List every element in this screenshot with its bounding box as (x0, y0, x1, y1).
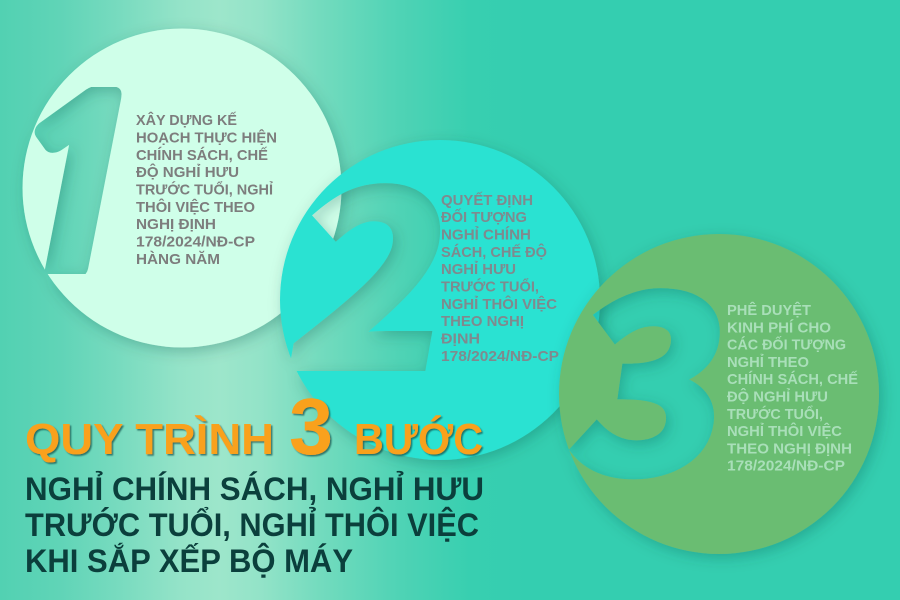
text block: step 2: QUYẾT ĐỊNH (441, 192, 533, 209)
subtitle: KHI SẮP XẾP BỘ MÁY (25, 543, 353, 579)
title (25, 382, 483, 471)
panel: step 1 circle with cut-out numeral (22, 28, 342, 348)
text block: step 3: KINH PHÍ CHO (727, 320, 831, 336)
title: 3 (289, 382, 333, 471)
text block: step 1: TRƯỚC TUỔI, NGHỈ (136, 180, 273, 198)
text block: step 2: ĐỊNH (441, 330, 480, 348)
text block: step 1: HÀNG NĂM (136, 251, 220, 268)
text block: step 2: NGHỈ HƯU (441, 261, 516, 278)
text block: step 1: NGHỊ ĐỊNH (136, 216, 216, 233)
text block: step 2: NGHỈ CHÍNH (441, 226, 531, 244)
text block: step 1: THÔI VIỆC THEO (136, 198, 255, 216)
text block: step 3: THEO NGHỊ ĐỊNH (727, 440, 852, 458)
text block: step 1: ĐỘ NGHỈ HƯU (136, 163, 239, 181)
text block: step 2: 178/2024/NĐ-CP (441, 348, 559, 365)
text block: step 2: ĐỐI TƯỢNG (441, 208, 527, 226)
title: QUY TRÌNH (25, 414, 274, 464)
panel: step 3 circle with cut-out numeral (559, 234, 879, 554)
text block: step 3: ĐỘ NGHỈ HƯU (727, 388, 828, 406)
text block: step 2: NGHỈ THÔI VIỆC (441, 295, 557, 313)
text block: step 2: SÁCH, CHẾ ĐỘ (441, 243, 547, 261)
panel: step 2 circle with cut-out numeral (280, 140, 600, 460)
text block: step 3 (727, 301, 858, 474)
text block: step 3: TRƯỚC TUỔI, (727, 405, 823, 423)
text block: step 2: TRƯỚC TUỔI, (441, 278, 539, 296)
text block: step 1: XÂY DỰNG KẾ (136, 111, 237, 129)
subtitle: TRƯỚC TUỔI, NGHỈ THÔI VIỆC (25, 507, 479, 543)
text block: step 2: THEO NGHỊ (441, 313, 524, 330)
text block: step 3: CHÍNH SÁCH, CHẾ (727, 371, 858, 388)
subtitle: NGHỈ CHÍNH SÁCH, NGHỈ HƯU (25, 471, 484, 507)
text block: step 1: 178/2024/NĐ-CP (136, 234, 255, 250)
text block: step 1: HOẠCH THỰC HIỆN (136, 128, 277, 146)
subtitle (25, 471, 484, 579)
title: BƯỚC (354, 414, 483, 464)
text block: step 3: CÁC ĐỐI TƯỢNG (727, 336, 846, 354)
text block: step 3: NGHỈ THÔI VIỆC (727, 422, 842, 440)
text block: step 2 (441, 192, 559, 365)
text block: step 3: 178/2024/NĐ-CP (727, 458, 845, 474)
text block: step 3: NGHỈ THEO (727, 354, 809, 371)
text block: step 3: PHÊ DUYỆT (727, 301, 811, 319)
text block: step 1: CHÍNH SÁCH, CHẾ (136, 147, 268, 164)
text block: step 1 (136, 111, 277, 268)
